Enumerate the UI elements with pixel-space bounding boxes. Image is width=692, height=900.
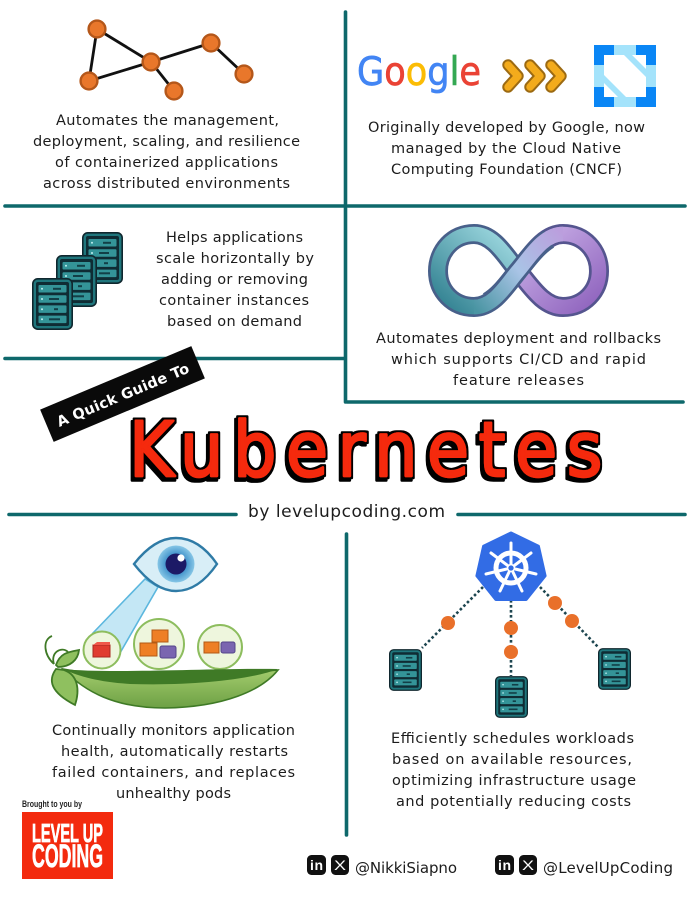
text: scheduling description: and potentially reducing costs <box>396 794 631 810</box>
icon: eye with beam watching pod <box>93 538 217 653</box>
panel: workload scheduling <box>390 533 641 810</box>
panel: horizontal scaling <box>33 230 319 330</box>
icon: google logo: Google <box>357 50 481 95</box>
logo: level up coding: LEVEL UP <box>32 818 103 848</box>
social: level up coding: @LevelUpCoding <box>543 859 673 877</box>
text: origin description: Computing Foundation (CNCF) <box>391 162 622 178</box>
text: monitoring description: failed containers, and replaces <box>52 765 295 781</box>
text: monitoring description: Continually monitors application <box>52 723 295 739</box>
icon: chevron arrows <box>508 65 561 87</box>
social: nikki siapno <box>307 855 457 877</box>
text: origin description: Originally developed by Google, now <box>368 120 645 136</box>
icons: worker servers <box>390 649 630 717</box>
title: Kubernetes <box>129 407 602 495</box>
text: automates description: Automates the management, <box>56 113 279 129</box>
diagram: kubernetes scheduler to servers <box>390 533 630 717</box>
logo: level up coding: CODING <box>32 838 103 874</box>
text: scaling description: Helps applications <box>166 230 303 246</box>
social: level up coding: X <box>522 857 535 873</box>
text: scheduling description: based on available resources, <box>392 752 632 768</box>
social: nikki siapno: X <box>334 857 347 873</box>
social: level up coding: in <box>498 857 511 873</box>
text: scaling description: scale horizontally by <box>156 251 314 267</box>
text: origin description: managed by the Cloud Native <box>391 141 621 157</box>
icon: cncf logo <box>594 45 656 107</box>
panel: automates management <box>33 21 305 192</box>
text: scaling description: adding or removing <box>161 272 308 288</box>
text: automates description: across distributed environments <box>43 176 290 192</box>
panel: origin google to cncf <box>357 45 656 178</box>
social: level up coding <box>495 855 673 877</box>
logo: level up coding <box>22 799 113 879</box>
text: scheduling description: Efficiently schedules workloads <box>391 731 634 747</box>
panel: health monitoring <box>45 538 300 802</box>
text: automates description: of containerized applications <box>55 155 278 171</box>
social: nikki siapno: in <box>310 857 323 873</box>
icon: pea pod with containers <box>45 619 278 708</box>
text: monitoring description: health, automatically restarts <box>61 744 288 760</box>
text: rollbacks description: Automates deployment and rollbacks <box>376 331 661 347</box>
icon: kubernetes helm logo <box>477 533 545 600</box>
icons: data packets <box>441 596 579 659</box>
icon: cluster network graph <box>81 21 252 99</box>
text: monitoring description: unhealthy pods <box>116 786 231 802</box>
icon: infinity loop <box>438 234 599 307</box>
text: scheduling description: optimizing infrastructure usage <box>392 773 636 789</box>
panel: ci/cd rollbacks <box>376 234 666 389</box>
logo: level up coding: Brought to you by <box>22 799 83 810</box>
banner: a quick guide to <box>40 346 205 442</box>
text: rollbacks description: which supports CI/CD and rapid <box>391 352 646 368</box>
icon: stacked servers <box>33 233 122 329</box>
text: scaling description: container instances <box>159 293 309 309</box>
subtitle: by levelupcoding.com <box>248 502 445 522</box>
banner: a quick guide to: A Quick Guide To <box>55 361 192 431</box>
social: nikki siapno: @NikkiSiapno <box>355 859 457 877</box>
text: automates description: deployment, scaling, and resilience <box>33 134 300 150</box>
text: rollbacks description: feature releases <box>453 373 584 389</box>
text: scaling description: based on demand <box>167 314 302 330</box>
